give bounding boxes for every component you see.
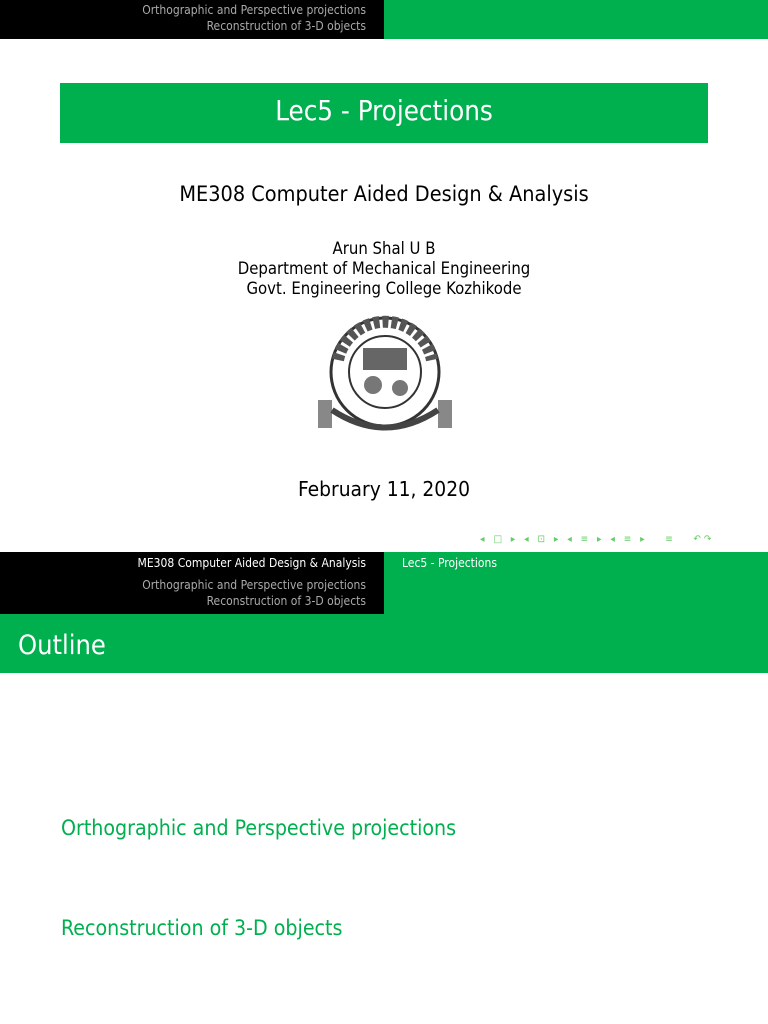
course name: ME308 Computer Aided Design & Analysis xyxy=(179,182,589,207)
header bar: slide 2 xyxy=(0,552,768,614)
header sections xyxy=(142,578,366,608)
outline item 1: Orthographic and Perspective projections xyxy=(61,815,456,840)
title box xyxy=(60,83,708,143)
frame title: Outline: Outline xyxy=(18,630,106,661)
author block xyxy=(238,239,530,298)
header section list: Reconstruction of 3-D objects xyxy=(207,19,366,33)
header sections: Reconstruction of 3-D objects xyxy=(207,594,366,608)
header sections: Orthographic and Perspective projections xyxy=(142,578,366,592)
header bar: slide 1 xyxy=(0,0,768,39)
title box: Lec5 - Projections xyxy=(275,95,493,127)
header section list xyxy=(142,3,366,33)
logo: college emblem xyxy=(318,316,452,430)
navigation symbols: ◂ □ ▸ ◂ ⊡ ▸ ◂ ≡ ▸ ◂ ≡ ▸ ≡ ↶↷ xyxy=(480,534,714,545)
outline item 2: Reconstruction of 3-D objects xyxy=(61,915,342,940)
author block: Department of Mechanical Engineering xyxy=(238,259,530,278)
lecture header: Lec5 - Projections xyxy=(402,556,497,570)
header section list: Orthographic and Perspective projections xyxy=(142,3,366,17)
author block: Arun Shal U B xyxy=(333,239,435,258)
author block: Govt. Engineering College Kozhikode xyxy=(246,279,522,298)
frame title: Outline xyxy=(0,614,768,673)
course name header: ME308 Computer Aided Design & Analysis xyxy=(138,556,366,570)
date: February 11, 2020 xyxy=(298,477,470,501)
